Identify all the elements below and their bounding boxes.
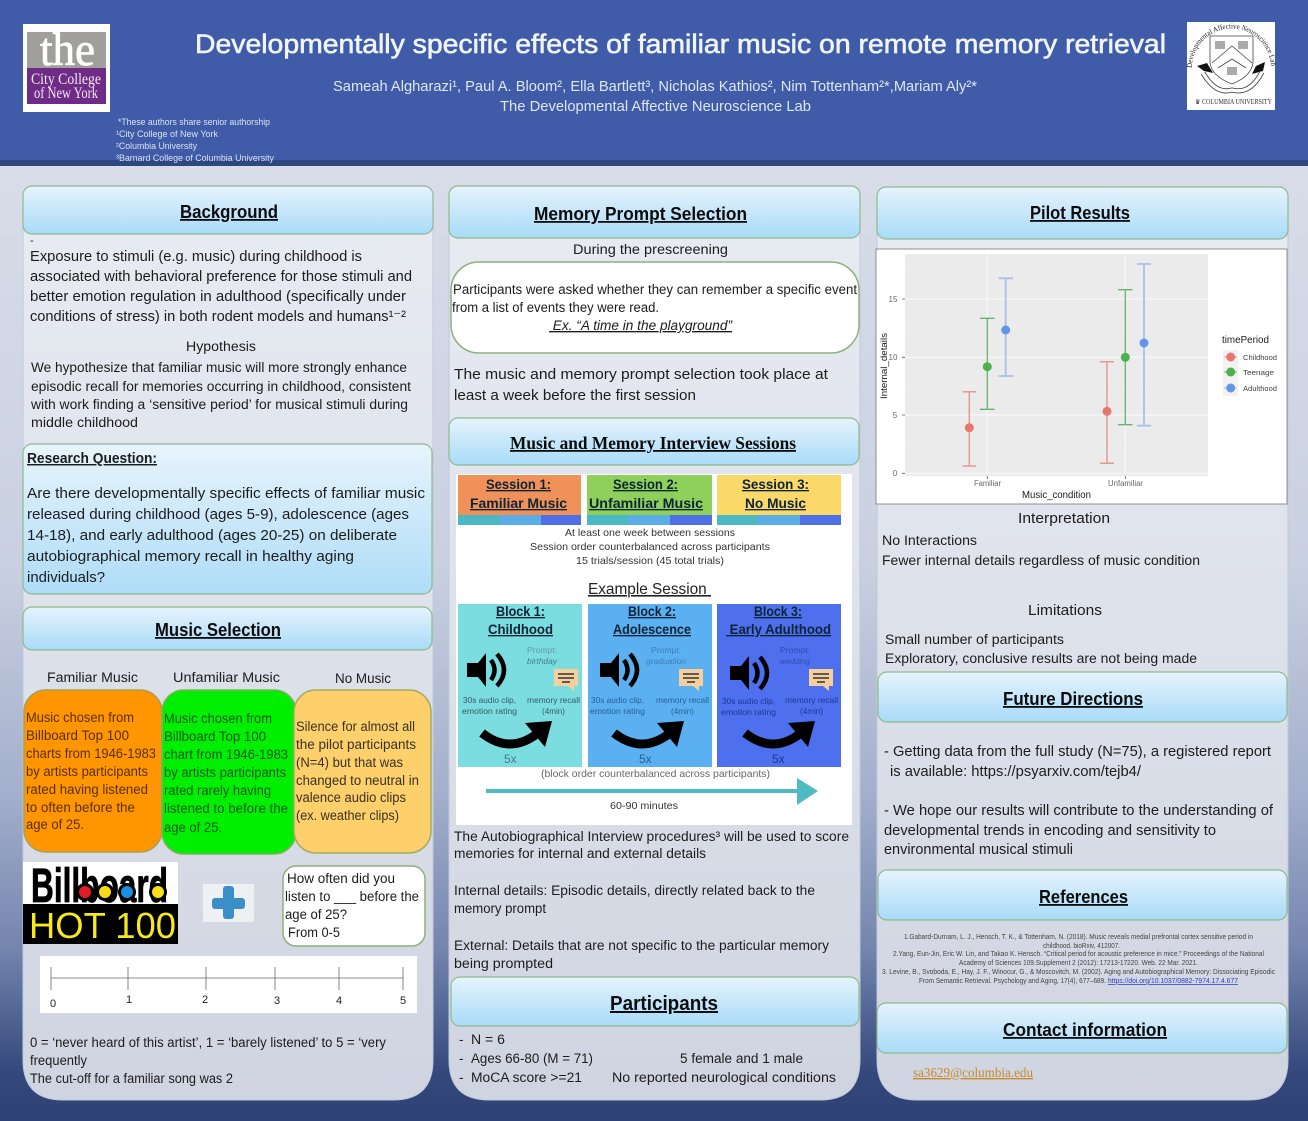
text: participants: - [459, 1070, 464, 1085]
callout: listening question: listen to ___ before the [285, 889, 419, 904]
logo: Developmental Affective Neuroscience Lab crest [1186, 22, 1276, 110]
y axis: 5 [893, 411, 898, 420]
heading: Memory Prompt Selection: Memory Prompt Selection [534, 204, 747, 224]
y axis: 10 [889, 353, 898, 362]
rating scale: 1 [126, 994, 132, 1006]
affiliations footnotes: ³Barnard College of Columbia University [116, 153, 274, 163]
series: teenage [980, 290, 1132, 425]
block 1: childhood: memory recall [527, 695, 580, 705]
panel: middle column [449, 186, 860, 1100]
heading: Background: Background [180, 202, 278, 222]
session 1 [458, 475, 581, 525]
column labels: music conditions: Familiar Music [47, 670, 138, 685]
card: no music: (N=4) but that was [296, 755, 403, 770]
panel: research question: Are there developmentally specific effects of familiar music [27, 485, 426, 502]
logo: City College of New York [23, 24, 110, 112]
heading: Example Session: Example Session [588, 581, 711, 598]
text: scoring procedure: External: Details that are not specific to the particular memory [454, 938, 829, 953]
text: hypothesis: middle childhood [31, 415, 138, 430]
text: references [882, 932, 1275, 985]
arrow: timeline [486, 778, 818, 805]
x axis: Music_condition [1022, 490, 1091, 501]
text: references: childhood. bioRxiv, 412007. [1043, 941, 1120, 950]
block 3: early adulthood: Early Adulthood [726, 622, 831, 637]
heading: Future Directions: Future Directions [1003, 689, 1143, 709]
rating scale: 0 [50, 998, 56, 1010]
card: familiar music: Music chosen from [26, 710, 134, 725]
logo: Developmental Affective Neuroscience Lab crest: ♛ COLUMBIA UNIVERSITY [1195, 98, 1272, 106]
title: Developmentally specific effects of familiar music on remote memory retrieval [195, 29, 1166, 59]
block 2: adolescence: memory recall [656, 695, 709, 705]
panel: research question: released during childhood (ages 5-9), adolescence (ages [27, 506, 409, 523]
session 2: Unfamiliar Music [589, 496, 704, 511]
text: future directions: environmental musical stimuli [884, 841, 1073, 858]
callout: listening question [283, 866, 425, 946]
heading: Memory Prompt Selection [449, 186, 860, 238]
panel: research question [23, 444, 432, 594]
text: participants: N = 6 [471, 1032, 505, 1047]
text: participants: Ages 66-80 (M = 71) [471, 1051, 593, 1066]
text: background: better emotion regulation in adulthood (specifically under [30, 288, 406, 305]
text: hypothesis: with work finding a ‘sensitive period’ for musical stimuli during [30, 397, 408, 412]
heading: Participants: Participants [610, 993, 718, 1015]
text: session notes [530, 527, 770, 567]
text: scoring procedure: memory prompt [454, 901, 546, 916]
column labels: music conditions: Unfamiliar Music [173, 670, 280, 685]
session 3 [717, 475, 841, 525]
block 2: adolescence: Adolescence [613, 622, 691, 637]
affiliations footnotes [116, 117, 274, 163]
heading: Music and Memory Interview Sessions [449, 418, 859, 465]
text: participants [459, 1032, 836, 1085]
text: selection timing [454, 366, 829, 404]
block 1: childhood: emotion rating [462, 706, 517, 716]
heading: Contact information: Contact information [1003, 1020, 1167, 1040]
card: no music [294, 690, 431, 853]
rating scale [40, 956, 417, 1013]
card: no music: Silence for almost all [296, 719, 415, 734]
callout: memory prompt question: Participants were asked whether they can remember a specific event [453, 282, 857, 297]
block 3: early adulthood: 30s audio clip, [722, 696, 775, 706]
heading: Background [23, 186, 433, 234]
text: references: 1.Gabard-Durnam, L. J., Hensch, T. K., & Tottenham, N. (2018). Music reveals medial prefrontal cortex sensitive period in [904, 932, 1253, 941]
block 3: early adulthood: Block 3: [754, 604, 802, 619]
panel: research question: individuals? [27, 569, 105, 586]
heading: Pilot Results: Pilot Results [1030, 203, 1130, 223]
logo: Developmental Affective Neuroscience Lab crest: Developmental Affective Neuroscience Lab [1186, 24, 1276, 68]
block 3: early adulthood: (4min) [800, 706, 823, 716]
logo: City College of New York: the [40, 24, 95, 76]
block 1: childhood: Childhood [488, 622, 553, 637]
session 3: No Music [745, 496, 806, 511]
card: unfamiliar music [162, 690, 296, 854]
x axis: Unfamiliar [1108, 479, 1143, 488]
block 1: childhood: birthday [527, 656, 558, 666]
affiliations footnotes: *These authors share senior authorship [118, 117, 270, 127]
block 2: adolescence [588, 604, 712, 767]
panel: research question: 14-18), and early adulthood (ages 20-25) on deliberate [27, 527, 397, 544]
card: no music: changed to neutral in [296, 773, 419, 788]
subheading: prescreening: During the prescreening [573, 242, 728, 257]
y axis: Internal_details [879, 333, 890, 399]
block 1: childhood: Prompt: [527, 645, 557, 655]
heading: References: References [1039, 887, 1128, 907]
panel: research question: Research Question: [27, 451, 157, 467]
text: future directions: - Getting data from the full study (N=75), a registered report [884, 743, 1272, 760]
logo: Billboard Hot 100 [23, 860, 178, 946]
text: future directions: - We hope our results will contribute to the understanding of [884, 802, 1274, 819]
text: rating explanation: The cut-off for a familiar song was 2 [30, 1071, 233, 1086]
y axis [879, 295, 905, 478]
rating scale: 5 [400, 995, 406, 1007]
text: background [30, 235, 412, 325]
card: no music: (ex. weather clips) [296, 808, 399, 823]
session 1: Session 1: [486, 477, 551, 492]
x axis [974, 476, 1143, 501]
card: unfamiliar music: age of 25. [164, 820, 222, 835]
text: limitations: Exploratory, conclusive results are not being made [885, 651, 1197, 666]
block 3: early adulthood: 5x [772, 752, 785, 766]
note: block order: (block order counterbalanced across participants) [541, 768, 770, 780]
block 3: early adulthood [717, 604, 841, 767]
text: interpretation: No Interactions [882, 533, 977, 548]
block 2: adolescence: graduation [646, 656, 686, 666]
text: hypothesis [30, 360, 411, 430]
card: unfamiliar music: chart from 1946-1983 [164, 747, 288, 762]
logo: Billboard Hot 100: Billboard [31, 860, 168, 913]
text: participants: - [459, 1051, 464, 1066]
block 1: childhood: 30s audio clip, [463, 695, 516, 705]
card: unfamiliar music: Music chosen from [164, 711, 272, 726]
block 2: adolescence: Block 2: [628, 604, 676, 619]
heading: Contact information [877, 1003, 1287, 1053]
text: participants: 5 female and 1 male [680, 1051, 803, 1066]
session 3: Session 3: [742, 477, 809, 492]
text: interpretation [882, 510, 1200, 568]
text: scoring procedure: The Autobiographical Interview procedures³ will be used to score [454, 829, 849, 844]
text: participants: No reported neurological conditions [612, 1070, 836, 1085]
block 3: early adulthood: memory recall [785, 695, 838, 705]
y axis: 15 [889, 295, 898, 304]
rating scale: 4 [336, 995, 342, 1007]
text: rating explanation: 0 = ‘never heard of this artist’, 1 = ‘barely listened’ to 5 = ‘very [30, 1035, 386, 1050]
card: familiar music: to often before the [26, 800, 135, 815]
block 2: adolescence: (4min) [671, 706, 694, 716]
icon: plus [203, 884, 254, 922]
text: session notes: At least one week between sessions [565, 527, 735, 539]
block 1: childhood: (4min) [542, 706, 565, 716]
callout: memory prompt question: Ex. “A time in the playground” [549, 318, 732, 333]
card: no music: valence audio clips [296, 790, 406, 805]
text: hypothesis: episodic recall for memories occurring in childhood, consistent [31, 379, 411, 394]
callout: memory prompt question: from a list of events they were read. [452, 300, 659, 315]
heading: Hypothesis: Hypothesis [186, 339, 256, 354]
text: selection timing: The music and memory prompt selection took place at [454, 366, 829, 383]
legend: Adulthood [1243, 384, 1277, 393]
label: duration: 60-90 minutes [610, 800, 678, 812]
block 2: adolescence: 30s audio clip, [591, 695, 644, 705]
text: rating explanation: frequently [30, 1053, 87, 1068]
affiliations footnotes: ²Columbia University [116, 141, 197, 151]
panel: research question: autobiographical memory recall in healthy aging [27, 548, 354, 565]
callout: listening question: age of 25? [285, 907, 347, 922]
chart: internal details by music condition [876, 249, 1287, 504]
text: rating explanation [30, 1035, 386, 1086]
panel: right column [876, 187, 1288, 1100]
block 1: childhood: Block 1: [496, 604, 545, 619]
text: scoring procedure [454, 829, 849, 971]
column labels: music conditions: No Music [335, 671, 391, 686]
lab name: The Developmental Affective Neuroscience Lab [500, 98, 811, 115]
callout: memory prompt question [451, 262, 859, 353]
rating scale: 3 [274, 995, 280, 1007]
card: unfamiliar music: rated rarely having [164, 783, 271, 798]
logo: City College of New York: City College [31, 71, 101, 88]
session 2: Session 2: [613, 477, 678, 492]
heading: Music Selection: Music Selection [155, 620, 281, 640]
header banner [0, 0, 1308, 166]
text: participants: MoCA score >=21 [471, 1070, 582, 1085]
legend: Childhood [1243, 353, 1277, 362]
text: references: https://doi.org/10.1037/0882-7974.17.4.677 [1108, 976, 1238, 985]
block 3: early adulthood: Prompt: [780, 645, 810, 655]
session 2 [587, 475, 712, 525]
heading: Future Directions [878, 672, 1287, 722]
heading: Music Selection [23, 607, 432, 650]
text: scoring procedure: Internal details: Episodic details, directly related back to the [454, 883, 815, 898]
text: future directions: developmental trends in encoding and sensitivity to [884, 822, 1216, 839]
text: background: Exposure to stimuli (e.g. music) during childhood is [30, 248, 362, 265]
block 2: adolescence: 5x [639, 752, 652, 766]
series: adulthood [998, 264, 1151, 426]
text: references: 2.Yang, Eun-Jin, Eric W. Lin, and Takao K. Hensch. “Critical period for acoustic preference in mice.” Proceedings of the National [893, 949, 1264, 958]
logo: City College of New York: of New York [34, 85, 98, 102]
text: references: From Semantic Retrieval. Psychology and Aging, 17(4), 677–689. [919, 976, 1106, 985]
card: unfamiliar music: Billboard Top 100 [164, 729, 266, 744]
heading: Pilot Results [877, 187, 1288, 239]
card: no music: the pilot participants [296, 737, 416, 752]
text: contact email: sa3629@columbia.edu [913, 1065, 1033, 1080]
card: unfamiliar music: by artists participants [164, 765, 286, 780]
column labels: music conditions [47, 670, 391, 686]
text: hypothesis: We hypothesize that familiar music will more strongly enhance [31, 360, 407, 375]
block 2: adolescence: emotion rating [590, 706, 645, 716]
text: selection timing: least a week before the first session [454, 387, 696, 404]
text: interpretation: Fewer internal details regardless of music condition [882, 553, 1200, 568]
text: scoring procedure: memories for internal and external details [454, 846, 706, 861]
block 2: adolescence: Prompt: [651, 645, 681, 655]
affiliations footnotes: ¹City College of New York [116, 129, 218, 139]
authors: Sameah Algharazi¹, Paul A. Bloom², Ella Bartlett³, Nicholas Kathios², Nim Tottenham²*,Mariam Aly²* [333, 78, 977, 95]
heading: References [878, 870, 1287, 920]
block 1: childhood: 5x [504, 752, 517, 766]
x axis: Familiar [974, 479, 1001, 488]
legend: Teenage [1243, 368, 1274, 377]
text: future directions: is available: https://psyarxiv.com/tejb4/ [890, 763, 1142, 780]
text: limitations: Small number of participants [885, 632, 1064, 647]
text: future directions [884, 743, 1274, 858]
text: session notes: Session order counterbalanced across participants [530, 541, 770, 553]
text: limitations: Limitations [1028, 602, 1102, 619]
callout: listening question: From 0-5 [288, 925, 340, 940]
callout: listening question: How often did you [287, 871, 395, 886]
series: childhood [962, 362, 1114, 466]
heading: Participants [451, 977, 859, 1026]
card: familiar music: by artists participants [26, 764, 148, 779]
session 1: Familiar Music [470, 496, 567, 511]
block 3: early adulthood: emotion rating [721, 707, 776, 717]
card: familiar music: charts from 1946-1983 [26, 746, 156, 761]
rating scale: 2 [202, 994, 208, 1006]
text: interpretation: Interpretation [1018, 510, 1110, 527]
text: references: Academy of Sciences 109.Supplement 2 (2012): 17213-17220. Web. 22 Mar. 2021. [959, 958, 1198, 967]
text: limitations [885, 602, 1197, 666]
block 3: early adulthood: wedding [780, 656, 810, 666]
y axis: 0 [893, 469, 898, 478]
legend: timePeriod [1222, 335, 1269, 346]
text: scoring procedure: being prompted [454, 956, 553, 971]
text: background: conditions of stress) in both rodent models and humans¹⁻² [30, 308, 406, 325]
text: participants: - [459, 1032, 464, 1047]
logo: Billboard Hot 100: HOT 100 [29, 905, 176, 946]
text: session notes: 15 trials/session (45 total trials) [576, 555, 724, 567]
diagram: study design [456, 474, 852, 825]
heading: Music and Memory Interview Sessions: Music and Memory Interview Sessions [510, 433, 796, 453]
block 1: childhood [458, 604, 582, 767]
panel: left column [23, 186, 433, 1100]
card: unfamiliar music: listened to before the [164, 801, 288, 816]
text: background: associated with behavioral preference for those stimuli and [30, 268, 412, 285]
legend [1222, 335, 1277, 396]
text: background: - [30, 235, 34, 247]
card: familiar music: age of 25. [26, 817, 84, 832]
card: familiar music: Billboard Top 100 [26, 728, 129, 743]
card: familiar music: rated having listened [26, 782, 148, 797]
card: familiar music [24, 690, 162, 852]
